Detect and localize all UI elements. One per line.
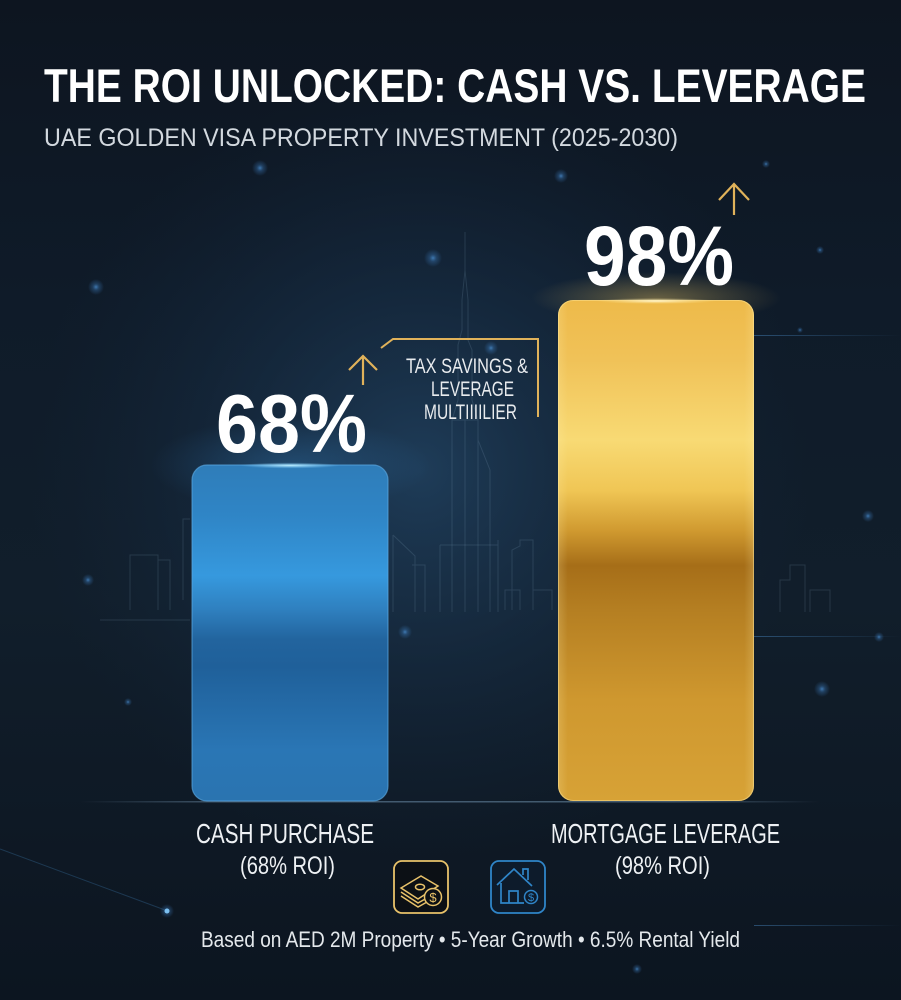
callout: tax savings and leverage multiplier: MULTIIIILIER — [424, 401, 517, 424]
icon: cash stack: $ — [429, 890, 437, 905]
label: mortgage leverage — [551, 818, 780, 880]
callout: tax savings and leverage multiplier: TAX SAVINGS & — [406, 355, 528, 378]
value: 98%: 98% — [584, 209, 734, 303]
skyline outline — [100, 232, 830, 620]
label: cash purchase — [196, 818, 374, 880]
label: cash purchase: (68% ROI) — [240, 852, 335, 880]
bar: cash purchase — [150, 417, 430, 801]
bar: mortgage leverage — [531, 272, 781, 801]
label: mortgage leverage: MORTGAGE LEVERAGE — [551, 818, 780, 849]
subtitle: UAE GOLDEN VISA PROPERTY INVESTMENT (2025-2030) — [44, 124, 678, 152]
footnote: Based on AED 2M Property • 5-Year Growth • 6.5% Rental Yield — [201, 927, 740, 952]
icon: house with dollar — [491, 861, 545, 913]
callout: tax savings and leverage multiplier: LEVERAGE — [431, 378, 514, 401]
icon: cash stack — [394, 861, 448, 913]
callout: tax savings and leverage multiplier — [381, 339, 538, 424]
label: cash purchase: CASH PURCHASE — [196, 818, 374, 849]
label: mortgage leverage: (98% ROI) — [615, 852, 710, 880]
arrow: mortgage up — [719, 184, 749, 215]
value: 68%: 68% — [216, 377, 367, 470]
arrow: cash up — [349, 356, 377, 385]
horizontal base line — [80, 801, 820, 802]
icon: house with dollar: $ — [528, 892, 534, 904]
